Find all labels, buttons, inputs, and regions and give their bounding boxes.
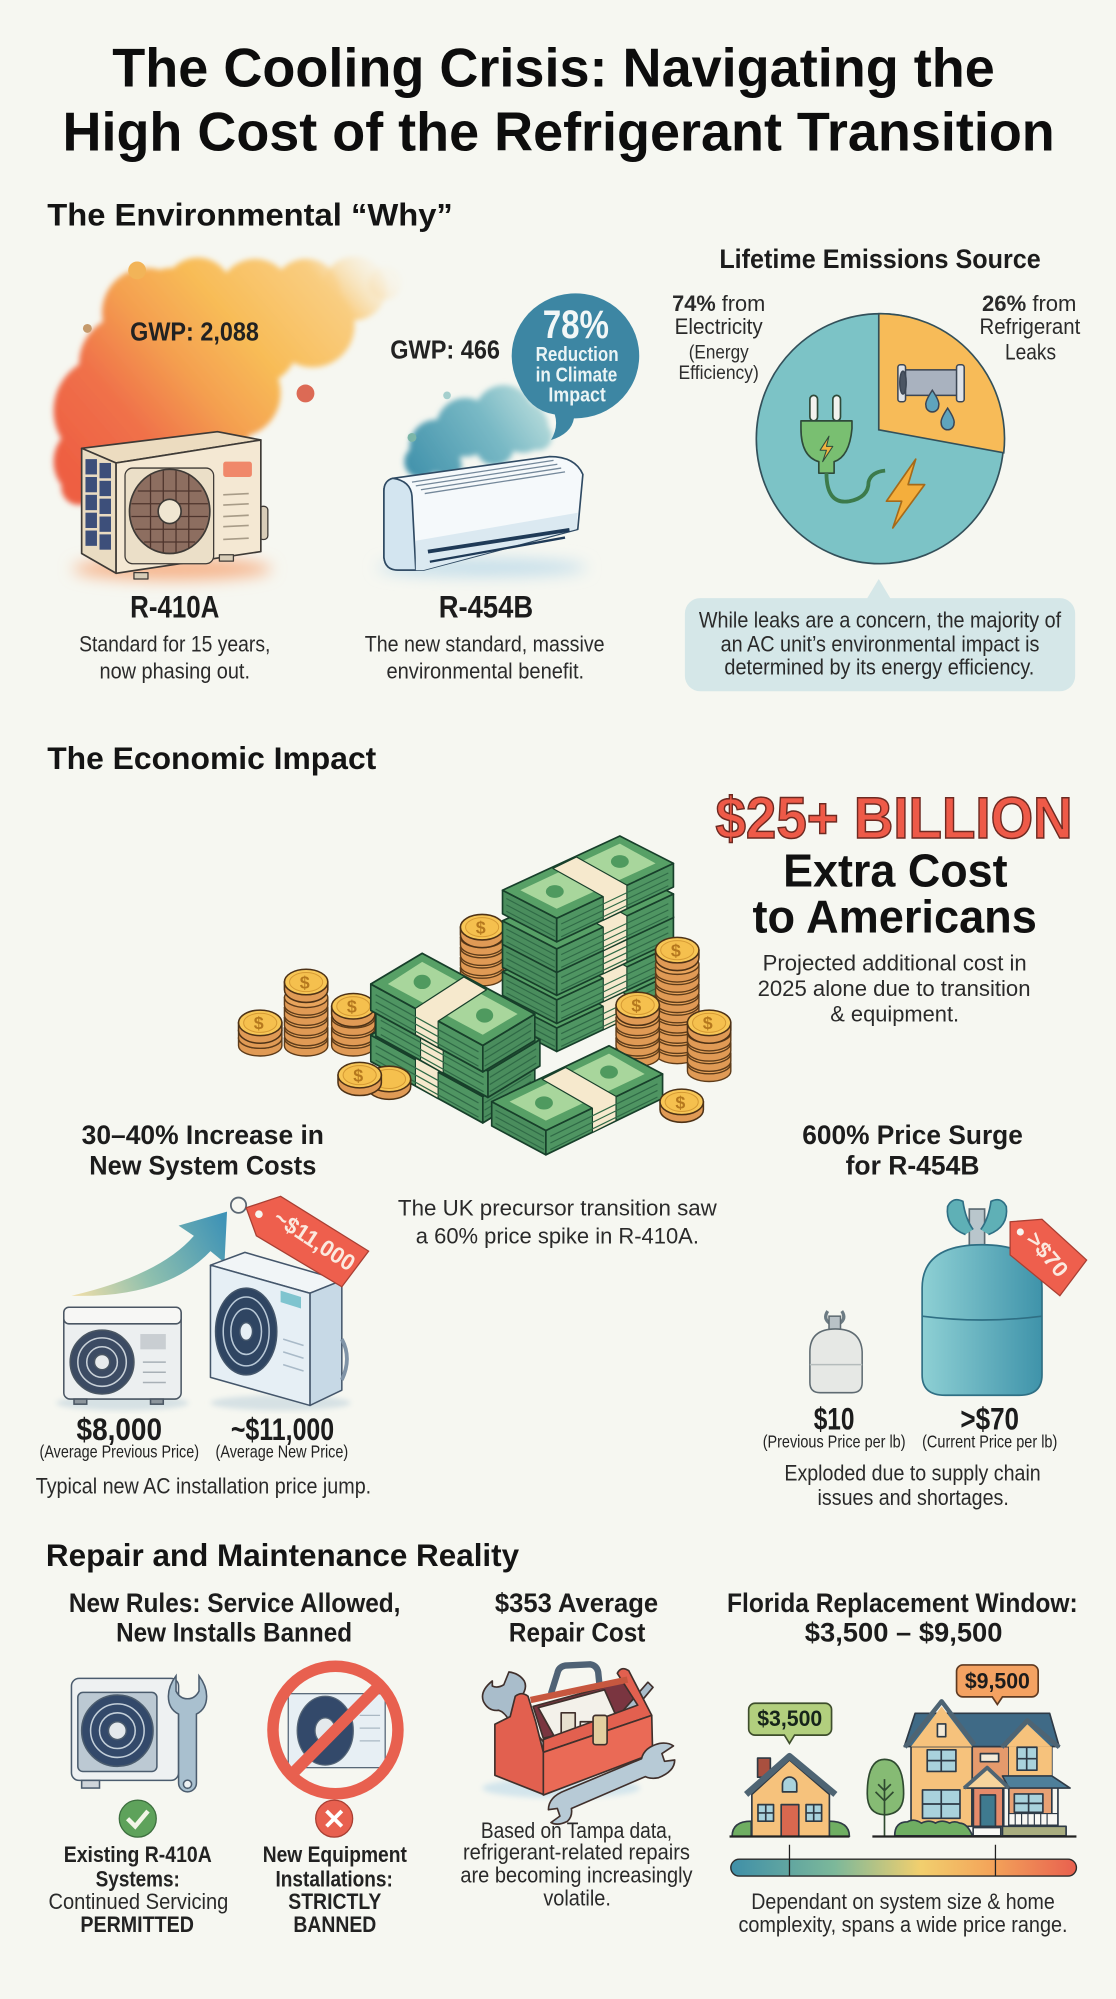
money bundle front [492, 1046, 663, 1155]
heading: new rules: New Rules: Service Allowed, [69, 1588, 400, 1618]
title [63, 37, 1055, 162]
icon: large outdoor unit [210, 1252, 351, 1411]
callout: 78% reduction: Reduction [536, 344, 619, 366]
price: $8,000: (Average Previous Price) [40, 1442, 199, 1462]
heading: 30-40% increase: New System Costs [89, 1151, 316, 1181]
label: GWP 466: GWP: 466 [390, 336, 500, 364]
icon: large cylinder [922, 1200, 1042, 1395]
heading: new rules [69, 1588, 400, 1647]
label: 26% from leaks: Leaks [1005, 340, 1056, 365]
label: 74% from electricity: Electricity [675, 314, 763, 339]
heading: new rules: New Installs Banned [116, 1617, 352, 1647]
ground line [730, 1836, 1076, 1838]
heading: $353 average repair [495, 1588, 658, 1647]
price: ~$11,000: (Average New Price) [216, 1442, 348, 1462]
label: R-454B: R-454B [439, 588, 533, 624]
text: new equipment: Installations: [276, 1866, 393, 1891]
callout: 78% reduction: Impact [548, 385, 606, 407]
label: 74% from electricity [672, 291, 765, 384]
panel: the economic impact [36, 740, 1087, 1510]
coin stack right [616, 937, 731, 1082]
callout: energy efficiency note: an AC unit’s environmental impact is [721, 632, 1039, 657]
illustration: money and coins pile [239, 836, 731, 1155]
text: Tampa data: Based on Tampa data, [481, 1818, 672, 1843]
heading: economic impact: The Economic Impact [47, 740, 377, 776]
coin stacks left: $ [300, 972, 310, 992]
callout: 78% reduction: in Climate [536, 364, 617, 386]
price: $10: $10 [814, 1401, 855, 1437]
text: existing systems: Systems: [96, 1866, 180, 1891]
callout: 78% reduction: 78% [543, 303, 609, 347]
icon: electric plug and bolt [801, 395, 925, 528]
text: projected cost: Projected additional cost in [763, 951, 1027, 976]
coin stacks left: $ [347, 997, 357, 1017]
callout: energy efficiency note [685, 579, 1075, 691]
label: $9,500 [957, 1665, 1038, 1705]
icon: small outdoor unit [56, 1307, 189, 1411]
text: existing systems: Continued Servicing [48, 1889, 228, 1914]
text: projected cost: & equipment. [830, 1002, 959, 1027]
text: projected cost [758, 951, 1031, 1027]
label: 26% from leaks: Refrigerant [980, 314, 1081, 339]
text: new equipment: New Equipment [263, 1842, 407, 1867]
heading: extra cost to Americans: Extra Cost [783, 844, 1008, 896]
text: R-410A description [79, 632, 270, 683]
text: UK precursor [398, 1195, 718, 1248]
heading: 600% price surge [802, 1120, 1023, 1181]
text: system size [738, 1889, 1068, 1937]
coin stack right: $ [703, 1013, 713, 1033]
icon: R-410A outdoor unit [73, 432, 272, 580]
label: GWP 2,088: GWP: 2,088 [130, 319, 259, 347]
price tag: ~$11,000 [231, 1196, 369, 1287]
text: system size: Dependant on system size & home [751, 1889, 1055, 1914]
coin stack right: $ [671, 941, 681, 961]
price: >$70: (Current Price per lb) [922, 1432, 1057, 1452]
text: R-454B description: The new standard, massive [365, 632, 605, 657]
text: projected cost: 2025 alone due to transition [758, 976, 1031, 1001]
label: $9,500: $9,500 [965, 1669, 1030, 1694]
text: new equipment [263, 1842, 407, 1937]
text: system size: complexity, spans a wide price range. [738, 1912, 1068, 1937]
text: Tampa data: refrigerant-related repairs [463, 1839, 690, 1864]
icon: small cylinder [810, 1311, 862, 1393]
label: $3,500 [749, 1703, 832, 1743]
price: ~$11,000: ~$11,000 [231, 1411, 334, 1447]
stat: $25+ billion: $25+ BILLION [716, 786, 1073, 851]
text: R-454B description: environmental benefit. [386, 658, 584, 683]
callout: energy efficiency note: While leaks are a concern, the majority of [699, 607, 1062, 632]
heading: extra cost to Americans: to Americans [752, 890, 1037, 942]
icon: small house [732, 1756, 849, 1837]
blue smoke cloud [404, 385, 552, 478]
price: $8,000 [40, 1411, 199, 1462]
label: $3,500: $3,500 [757, 1706, 822, 1731]
text: existing systems [48, 1842, 228, 1937]
text: new equipment: BANNED [293, 1912, 376, 1937]
icon: toolbox [482, 1664, 675, 1824]
heading: lifetime emissions source: Lifetime Emissions Source [719, 244, 1041, 274]
icon: red cross [316, 1800, 353, 1837]
icon: large house [895, 1701, 1070, 1836]
heading: 600% price surge: for R-454B [846, 1151, 980, 1181]
text: new equipment: STRICTLY [288, 1889, 381, 1914]
icon: R-454B split unit [378, 457, 587, 576]
price tag: >$70: >$70 [1022, 1227, 1074, 1282]
label: R-410A: R-410A [130, 588, 219, 624]
text: Tampa data [460, 1818, 693, 1910]
orange emissions cloud [54, 256, 402, 505]
icon: leaking pipe [898, 365, 964, 430]
text: R-410A description: Standard for 15 years, [79, 632, 270, 657]
arrow: price rise [71, 1212, 227, 1296]
money stack tall [503, 836, 673, 1052]
text: existing systems: PERMITTED [80, 1912, 194, 1937]
price: ~$11,000 [216, 1411, 348, 1462]
panel: R-454B price surge [763, 1120, 1087, 1510]
heading: Florida window [727, 1588, 1078, 1647]
text: Tampa data: are becoming increasingly [460, 1862, 693, 1887]
coin stacks left: $ [254, 1013, 264, 1033]
callout: energy efficiency note: determined by its energy efficiency. [724, 655, 1034, 680]
price: >$70 [922, 1401, 1057, 1452]
heading: 30-40% increase: 30–40% Increase in [82, 1120, 324, 1150]
icon: green check [119, 1800, 156, 1837]
text: existing systems: Existing R-410A [64, 1842, 212, 1867]
heading: environmental why: The Environmental “Why” [47, 197, 453, 233]
text: supply chain [784, 1461, 1041, 1510]
text: supply chain: Exploded due to supply chain [784, 1461, 1041, 1486]
heading: Florida window: $3,500 – $9,500 [805, 1617, 1002, 1647]
coin stack back [460, 914, 504, 986]
loose coins: $ [353, 1066, 363, 1086]
pie chart: lifetime emissions [756, 314, 1005, 564]
text: supply chain: issues and shortages. [818, 1485, 1009, 1510]
price: $10: (Previous Price per lb) [763, 1432, 906, 1452]
label: 74% from electricity: (Energy [689, 341, 749, 363]
icon: banned unit [273, 1666, 398, 1794]
text: Tampa data: volatile. [543, 1885, 611, 1910]
loose coins: $ [675, 1092, 685, 1112]
icon: unit with wrench [71, 1676, 207, 1792]
text: R-410A description: now phasing out. [100, 658, 250, 683]
panel: the environmental why [47, 197, 1081, 691]
heading: 600% price surge: 600% Price Surge [802, 1120, 1023, 1150]
icon: tree [867, 1759, 904, 1837]
price: $10 [763, 1401, 906, 1452]
panel: new system costs [36, 1120, 371, 1498]
panel: repair and maintenance reality [46, 1537, 1078, 1937]
callout: 78% reduction [512, 293, 639, 440]
title: The Cooling Crisis: Navigating the [112, 37, 995, 99]
money stack front left [371, 953, 540, 1123]
loose coins [338, 1062, 703, 1122]
coin stack right: $ [631, 995, 641, 1015]
heading: Florida window: Florida Replacement Window: [727, 1588, 1078, 1618]
coin stacks left [239, 969, 375, 1056]
heading: $353 average repair: Repair Cost [509, 1617, 645, 1647]
heading: extra cost to Americans [752, 844, 1037, 942]
heading: repair and maintenance: Repair and Maintenance Reality [46, 1537, 519, 1573]
text: UK precursor: a 60% price spike in R-410A. [416, 1223, 699, 1248]
label: 26% from leaks [980, 291, 1081, 365]
title: High Cost of the Refrigerant Transition [63, 100, 1055, 162]
gradient price range bar [731, 1845, 1076, 1876]
price tag: >$70 [1010, 1219, 1087, 1296]
price: >$70: >$70 [960, 1401, 1019, 1437]
heading: $353 average repair: $353 Average [495, 1588, 658, 1618]
price tag: ~$11,000: ~$11,000 [269, 1204, 360, 1276]
text: installation price jump: Typical new AC installation price jump. [36, 1473, 371, 1498]
text: UK precursor: The UK precursor transition saw [398, 1195, 718, 1220]
coin stack back: $ [476, 918, 486, 938]
label: 74% from electricity: Efficiency) [679, 362, 759, 384]
label: 26% from leaks: 26% from [982, 291, 1076, 316]
text: R-454B description [365, 632, 605, 683]
price: $8,000: $8,000 [77, 1411, 162, 1447]
heading: 30-40% increase [82, 1120, 324, 1181]
label: 74% from electricity: 74% from [672, 291, 765, 316]
